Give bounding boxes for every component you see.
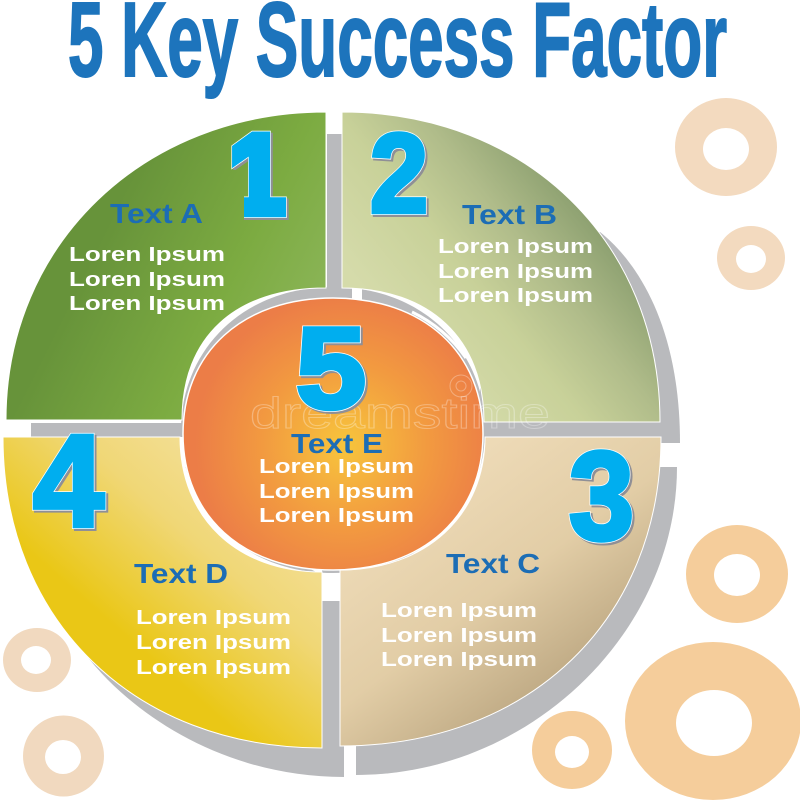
text block: C: Loren Ipsum [381,625,537,647]
ring: lower right big [625,642,800,800]
text block: A: Loren Ipsum [69,293,225,315]
ring: top right small [717,226,785,290]
number 1 [231,130,289,220]
panel: B olive [342,112,660,422]
heading: Text B: Text B [462,199,557,230]
number 3: 3 [569,427,634,566]
text block: D [136,607,291,679]
text block: A: Loren Ipsum [69,269,225,291]
white sliver beside centre circle [412,312,466,358]
number 2: 2 [370,111,428,236]
text block: C [381,600,537,671]
panel: D yellow [3,437,322,748]
heading: Text A: Text A [110,198,203,229]
heading: Text C: Text C [446,548,540,579]
number 4: 4 [35,409,106,556]
number 4: 4 [33,407,104,554]
text block: B: Loren Ipsum [438,236,593,258]
text block: D: Loren Ipsum [136,607,291,629]
number 2: 2 [370,111,428,236]
text block: A: Loren Ipsum [69,244,225,266]
number 3: 3 [571,429,636,568]
text block: C: Loren Ipsum [381,600,537,622]
number 1: 1 [231,114,287,239]
panel: C tan [340,437,661,746]
text block: D: Loren Ipsum [136,632,291,654]
text block: E: Loren Ipsum [259,505,414,527]
gaps in grey shadow [178,286,362,601]
text block: E: Loren Ipsum [259,456,414,478]
number 1: 1 [229,112,285,237]
watermark: dreamstime [250,389,550,438]
text block: B [438,236,593,307]
panel: E central circle [183,298,550,570]
text block: E [259,456,414,527]
number 3: 3 [569,427,634,566]
heading: Text E: Text E [291,428,383,459]
watermark [250,375,550,438]
number 2: 2 [372,113,430,238]
number 5: 5 [296,305,366,433]
text block: C: Loren Ipsum [381,649,537,671]
text block: D: Loren Ipsum [136,657,291,679]
number 5: 5 [298,307,368,435]
ring: bottom left [23,715,104,797]
ring: left small [3,628,71,692]
heading: Text D: Text D [134,558,228,589]
grey 3D shadow layer [31,134,680,777]
ring: lower right medium [686,525,788,623]
number 5: 5 [296,305,366,433]
number 4: 4 [33,407,104,554]
text block: B: Loren Ipsum [438,261,593,283]
text block: A [69,244,225,315]
panel: A green [6,112,326,420]
ring: top right large [675,98,777,196]
number 1: 1 [229,112,285,237]
text block: B: Loren Ipsum [438,285,593,307]
text block: E: Loren Ipsum [259,481,414,503]
ring: bottom centre [532,711,612,789]
